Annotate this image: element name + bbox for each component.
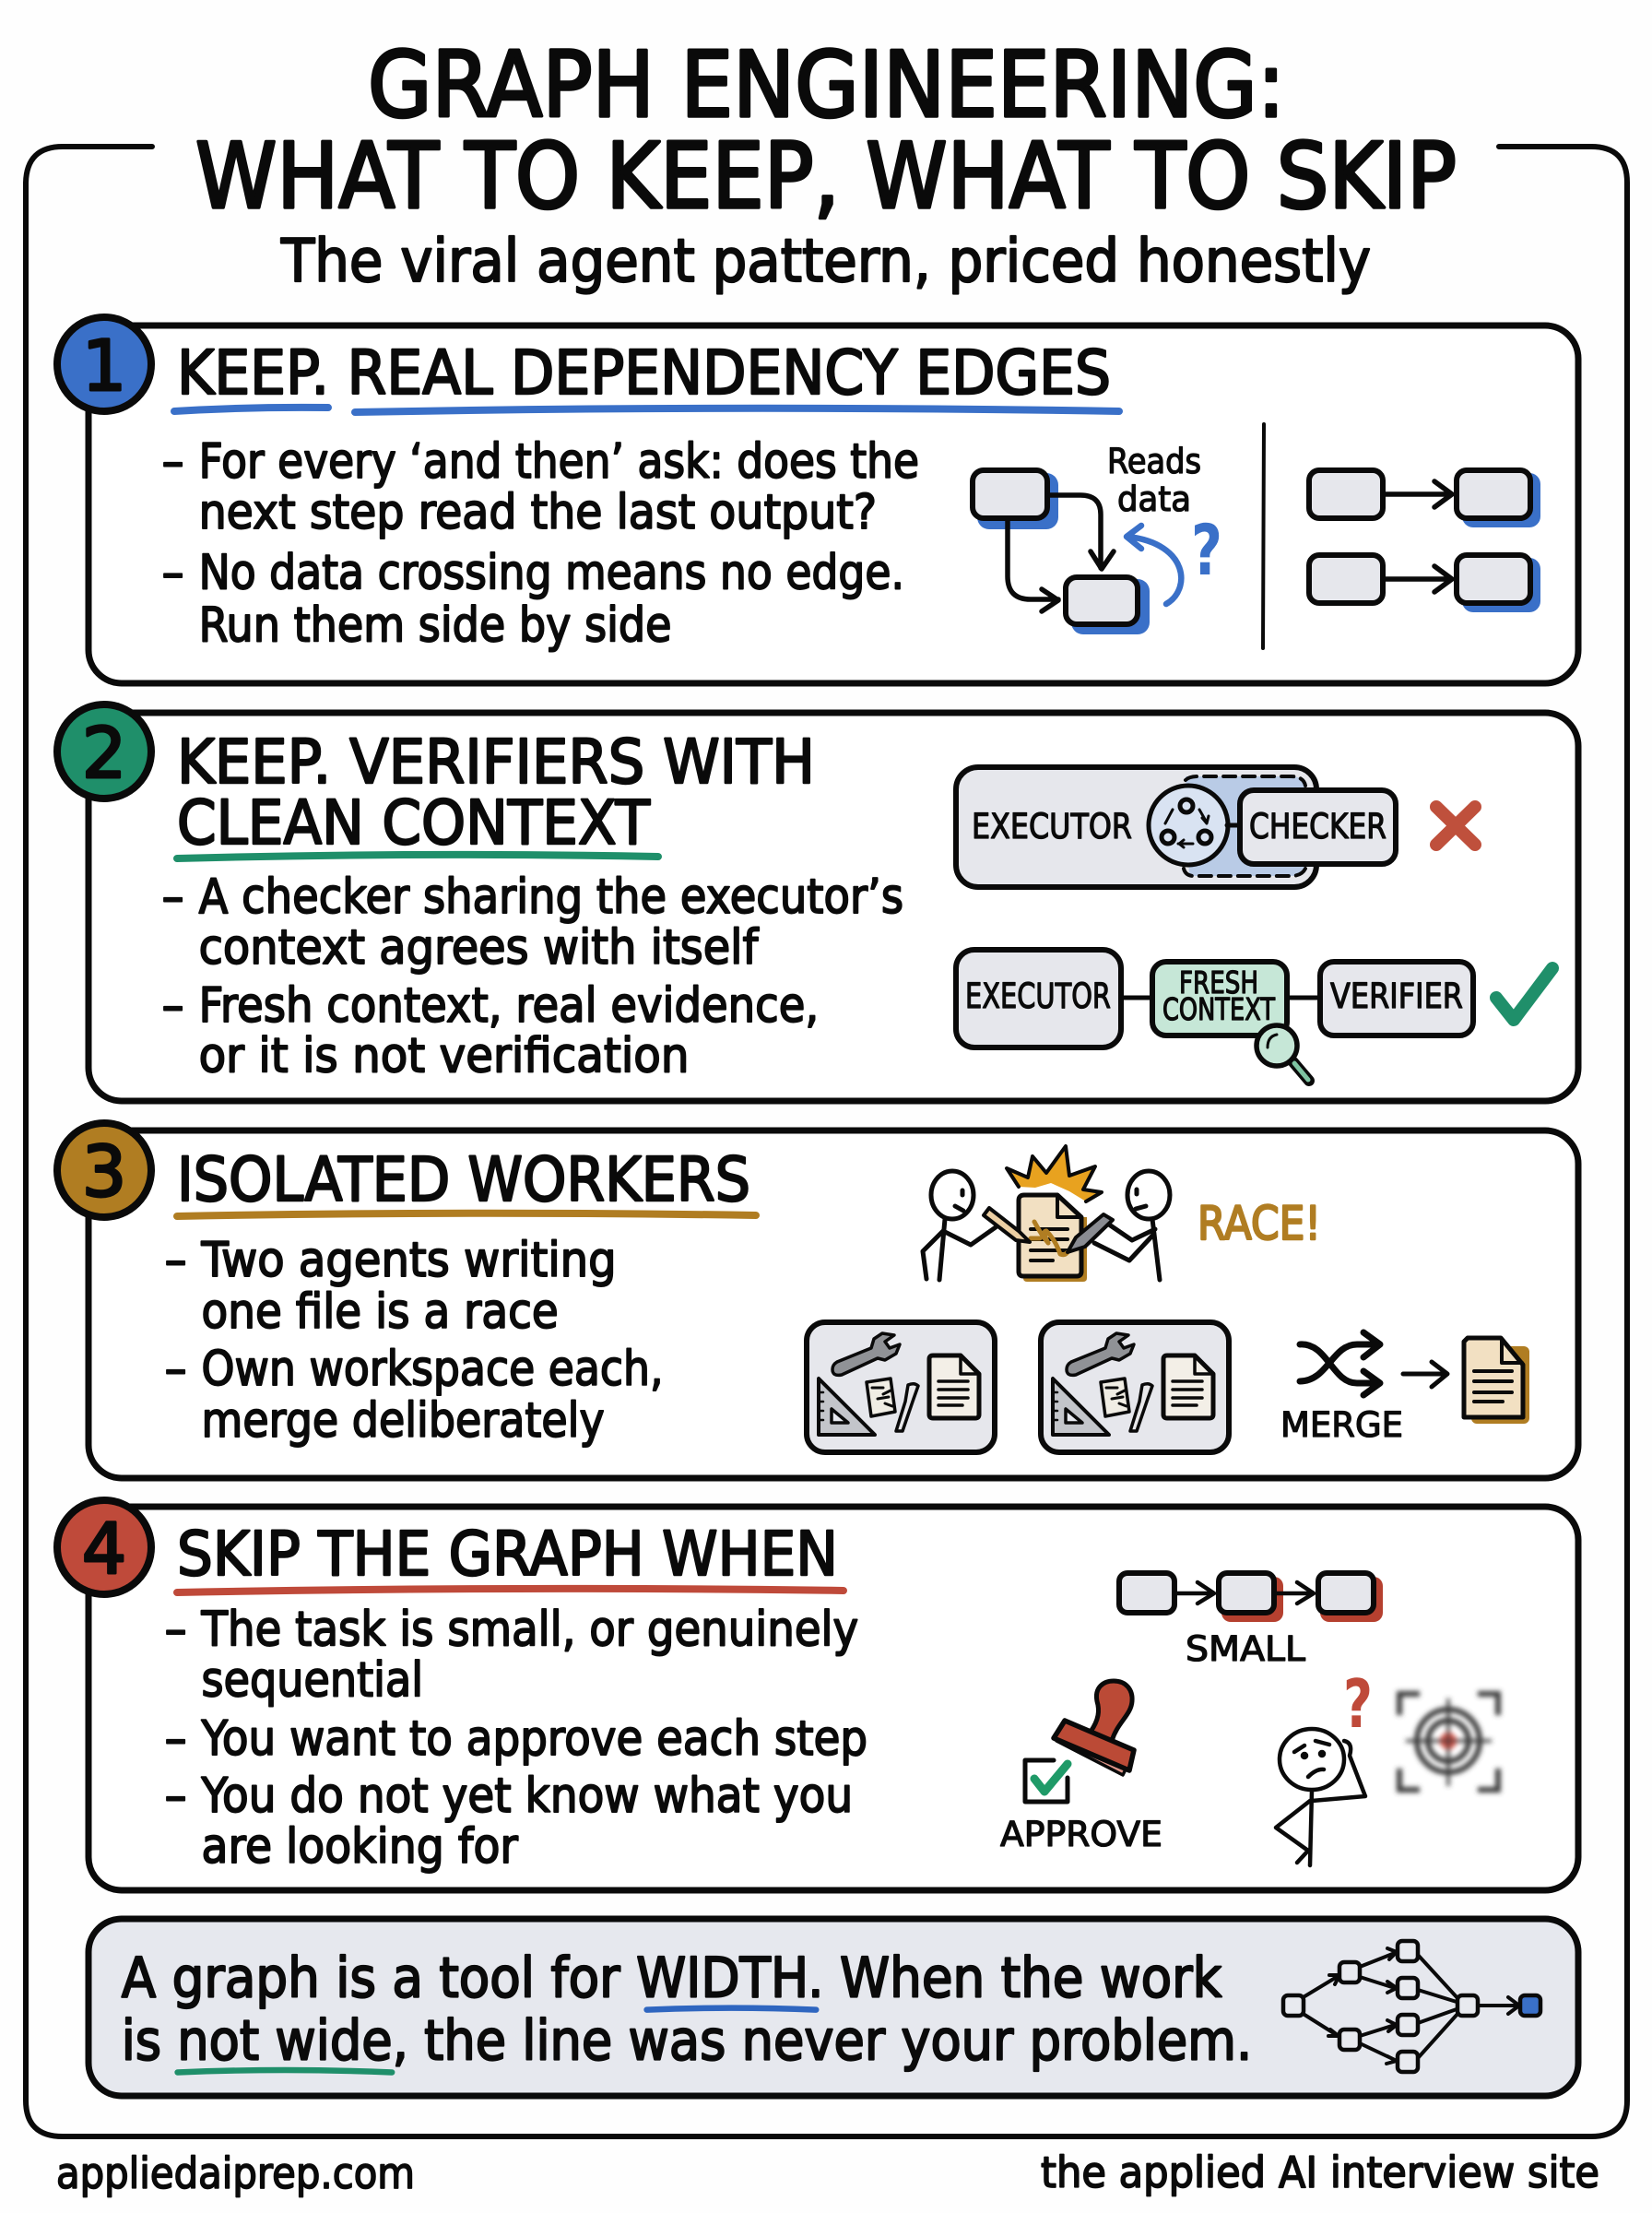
footer right: the applied AI interview site [1041,2148,1599,2197]
bullets 1: Run them side by side [199,598,672,654]
heading 2: KEEP. VERIFIERS WITH [177,727,815,798]
number badge 1 [57,317,151,411]
icon: green check [1496,968,1552,1020]
bullets 1: next step read the last output? [199,485,877,540]
icon: blurred target [1399,1694,1498,1790]
subtitle: The viral agent pattern, priced honestly [280,228,1371,296]
pencil right [1068,1214,1113,1252]
panel: skip the graph when [57,1500,1578,1890]
bullets 3: Two agents writing [201,1233,617,1288]
label: race: RACE! [1198,1197,1321,1250]
bullets 4: are looking for [202,1819,518,1875]
diagram: fresh context verifier: EXECUTOR [965,976,1111,1016]
diagram: shared context checker: EXECUTOR [972,807,1132,846]
label: merge: MERGE [1280,1405,1403,1445]
bullets 3: – [165,1233,187,1288]
panel: keep verifiers with clean context [57,704,1578,1101]
callout text [122,1947,1252,2074]
bullets 3 [165,1233,664,1449]
icon: merged document [1464,1338,1529,1424]
workspace 2 [1041,1322,1229,1452]
diagram: small chain: SMALL [1186,1629,1305,1669]
heading 2: CLEAN CONTEXT [177,787,651,858]
bullets 4 [165,1602,867,1875]
icon: magnifier [1257,1025,1309,1081]
icon: approval stamp [1025,1681,1134,1802]
bullets 2: – [162,870,184,925]
bullets 1: – [162,546,184,601]
title: WHAT TO KEEP, WHAT TO SKIP [195,124,1457,230]
number badge 4: 4 [82,1508,126,1590]
panel: keep real dependency edges [57,317,1578,683]
stick figure left [923,1171,996,1280]
diagram: fresh context verifier: FRESH [1179,964,1258,1000]
bullets 4: You want to approve each step [201,1711,867,1767]
icon: contested document [1019,1195,1087,1282]
icon: wide graph [1283,1941,1540,2072]
diagram: real dependency [973,442,1222,634]
callout text: A graph is a tool for WIDTH. When the work [122,1947,1222,2011]
title: GRAPH ENGINEERING: [368,33,1285,138]
bullets 3: – [165,1342,187,1397]
heading 2 [177,727,815,858]
callout [88,1919,1578,2096]
bullets 2: context agrees with itself [199,920,760,976]
title [195,33,1457,230]
icon: burst [1007,1146,1102,1201]
heading 3: ISOLATED WORKERS [177,1144,750,1215]
diagram: fresh context verifier: CONTEXT [1162,991,1276,1027]
bullets 1: – [162,434,184,490]
illustration: race on one file [923,1146,1170,1282]
bullets 4: You do not yet know what you [201,1769,853,1824]
number badge 2: 2 [82,712,126,794]
arrow to merged file [1403,1362,1447,1387]
callout text: is not wide, the line was never your problem. [122,2009,1252,2074]
icon: red cross [1436,807,1475,845]
bullets 2: A checker sharing the executor’s [199,870,903,925]
icon: confused figure [1276,1729,1365,1865]
panel: isolated workers [57,1123,1578,1478]
bullets 3: merge deliberately [202,1393,605,1449]
heading 4: SKIP THE GRAPH WHEN [177,1519,838,1590]
icon: merge arrows [1300,1332,1380,1395]
diagram: real dependency: Reads [1107,442,1201,481]
bullets 4: – [165,1602,187,1657]
bullets 3: one file is a race [202,1284,559,1340]
diagram: parallel steps [1309,470,1540,612]
diagram: small chain [1119,1573,1383,1669]
bullets 4: – [165,1769,187,1824]
number badge 3 [57,1123,151,1217]
footer left: appliedaiprep.com [56,2148,415,2198]
diagram: fresh context verifier [956,950,1473,1081]
bullets 2: Fresh context, real evidence, [199,978,819,1034]
icon: red question mark: ? [1343,1665,1373,1743]
bullets 2: or it is not verification [199,1029,690,1084]
bullets 4: The task is small, or genuinely [201,1602,858,1657]
bullets 3: Own workspace each, [202,1342,664,1397]
bullets 1 [162,434,919,654]
bullets 2: – [162,978,184,1034]
bullets 1: No data crossing means no edge. [199,546,904,601]
diagram: real dependency: data [1117,479,1191,519]
heading 1: KEEP. REAL DEPENDENCY EDGES [177,337,1111,408]
pencil left [984,1208,1030,1242]
number badge 1: 1 [82,325,126,407]
number badge 3: 3 [82,1130,126,1213]
workspace 1 [807,1322,995,1452]
diagram: fresh context verifier: VERIFIER [1330,976,1463,1016]
bullets 1: For every ‘and then’ ask: does the [199,434,919,490]
stick figure right [1094,1171,1170,1280]
bullets 2 [162,870,903,1084]
divider [1263,424,1264,648]
diagram: real dependency: ? [1191,509,1222,591]
number badge 4 [57,1500,151,1594]
diagram: shared context checker [956,767,1396,887]
number badge 2 [57,704,151,799]
bullets 4: sequential [202,1652,423,1708]
bullets 4: – [165,1711,187,1767]
label: approve: APPROVE [1000,1815,1162,1854]
diagram: shared context checker: CHECKER [1249,807,1386,846]
